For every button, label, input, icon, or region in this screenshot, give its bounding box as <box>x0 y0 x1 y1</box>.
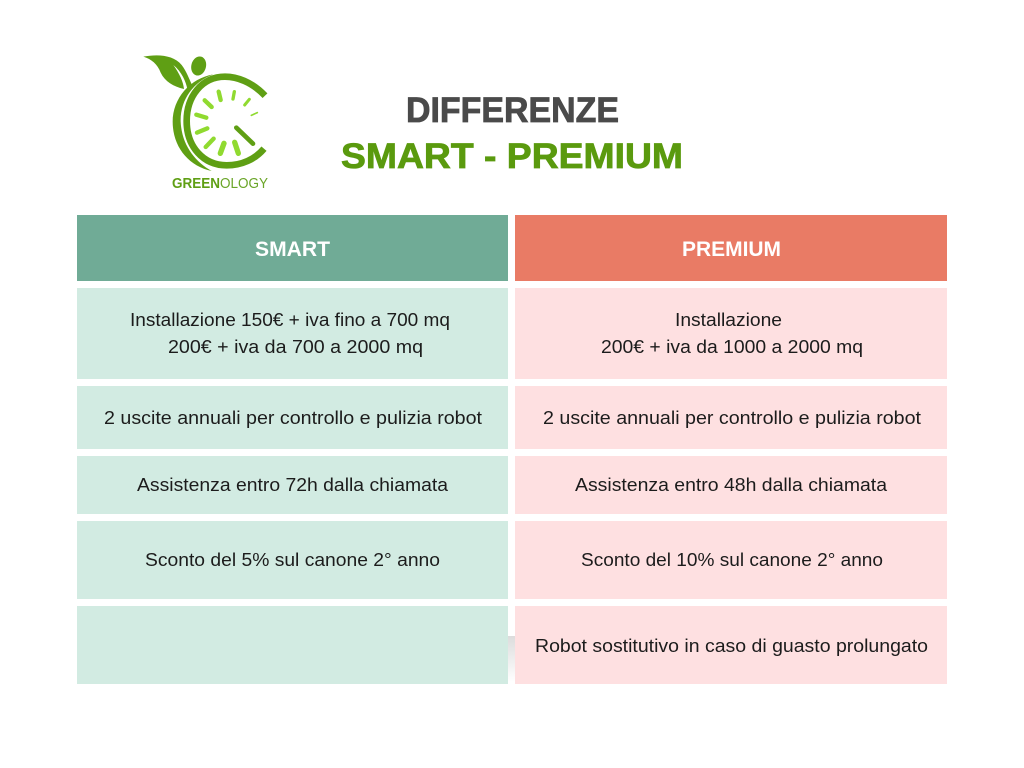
panel: PREMIUM column <box>515 215 947 684</box>
row: assistance: Assistenza entro 48h dalla chiamata <box>575 475 888 495</box>
row: annual visits: 2 uscite annuali per controllo e pulizia robot <box>543 408 921 428</box>
row: replacement robot: Robot sostitutivo in caso di guasto prolungato <box>535 636 928 656</box>
title line 2: SMART - PREMIUM <box>341 137 683 176</box>
title <box>341 91 683 176</box>
logo: Greenology <box>143 55 268 192</box>
icon: leaf and clock <box>143 55 265 171</box>
row: installation <box>515 288 947 379</box>
row: assistance: Assistenza entro 72h dalla chiamata <box>137 475 449 495</box>
header: PREMIUM <box>515 215 947 281</box>
title line 1: DIFFERENZE <box>406 91 619 130</box>
row: installation: 200€ + iva da 1000 a 2000 mq <box>601 337 863 357</box>
row: discount <box>515 521 947 599</box>
row: discount <box>77 521 508 599</box>
row: replacement robot <box>515 606 947 684</box>
row: installation: Installazione <box>675 310 782 330</box>
row: installation: Installazione 150€ + iva fino a 700 mq <box>130 310 450 330</box>
row: empty cell <box>77 606 508 684</box>
panel: SMART column <box>77 215 508 684</box>
logo wordmark: GREENOLOGY <box>172 176 268 192</box>
row: discount: Sconto del 5% sul canone 2° anno <box>145 550 440 570</box>
row: discount: Sconto del 10% sul canone 2° anno <box>581 550 883 570</box>
row: assistance <box>77 456 508 514</box>
row: installation: 200€ + iva da 700 a 2000 mq <box>168 337 423 357</box>
header: SMART: SMART <box>255 238 330 261</box>
header: PREMIUM: PREMIUM <box>682 238 781 261</box>
row: installation <box>77 288 508 379</box>
row: assistance <box>515 456 947 514</box>
header: SMART <box>77 215 508 281</box>
row: annual visits: 2 uscite annuali per controllo e pulizia robot <box>104 408 482 428</box>
row: annual visits <box>77 386 508 449</box>
decorative gray fade <box>508 636 515 682</box>
row: annual visits <box>515 386 947 449</box>
